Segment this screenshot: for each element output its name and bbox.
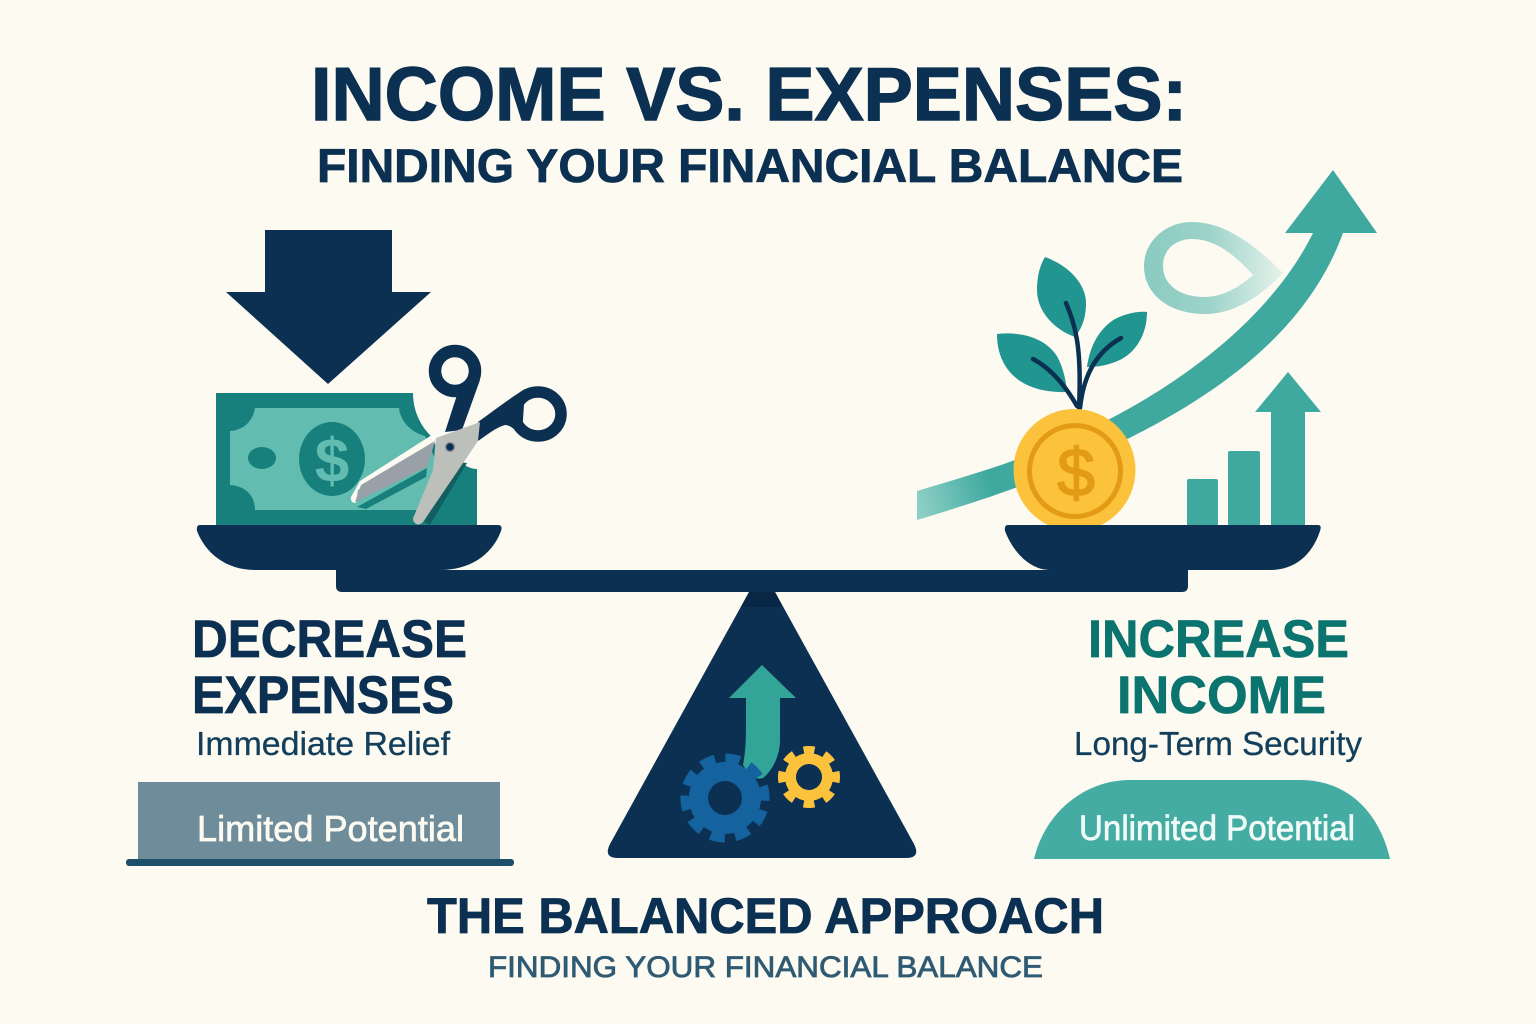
heading: INCOME: [1117, 666, 1326, 725]
left scale pan: [197, 525, 502, 570]
heading: INCREASE: [1088, 610, 1349, 669]
icon: faded loop: [1144, 222, 1283, 314]
scale beam: [336, 570, 1188, 592]
badge: limited potential: Limited Potential: [197, 808, 464, 849]
badge: limited potential: [126, 782, 514, 866]
title: [311, 52, 1187, 192]
icon: growth arrow: [917, 170, 1377, 520]
main heading: INCOME VS. EXPENSES:: [311, 52, 1187, 136]
heading: [1088, 610, 1349, 725]
icon: gold coin: [1014, 409, 1136, 531]
icon: blue gear: [677, 750, 773, 846]
caption heading: THE BALANCED APPROACH: [427, 888, 1104, 944]
infographic canvas: [126, 66, 1390, 978]
icon: scissors: [351, 351, 561, 525]
right label: increase income: [1074, 610, 1363, 762]
left label: decrease expenses: [192, 610, 467, 762]
heading: [192, 610, 467, 725]
bottom caption: [427, 888, 1104, 984]
bar chart with arrow: [1187, 372, 1321, 526]
subheading: FINDING YOUR FINANCIAL BALANCE: [317, 139, 1183, 192]
icon: yellow gear: [778, 746, 840, 808]
icon: up arrow: [729, 665, 796, 779]
icon: down arrow: [226, 230, 431, 384]
icon: gold coin: $: [1057, 435, 1095, 511]
icon: plant: [997, 257, 1147, 408]
right scale pan: [1005, 525, 1321, 570]
heading: DECREASE: [192, 610, 467, 669]
heading: EXPENSES: [192, 666, 454, 725]
badge: unlimited potential: Unlimited Potential: [1079, 809, 1355, 848]
badge: unlimited potential: [1034, 780, 1390, 859]
fulcrum triangle: [608, 592, 916, 858]
subtext: Immediate Relief: [196, 725, 451, 762]
icon: banknote: [216, 393, 477, 525]
subtext: Long-Term Security: [1074, 725, 1363, 762]
caption subheading: FINDING YOUR FINANCIAL BALANCE: [488, 951, 1043, 984]
icon: banknote: $: [315, 427, 349, 496]
